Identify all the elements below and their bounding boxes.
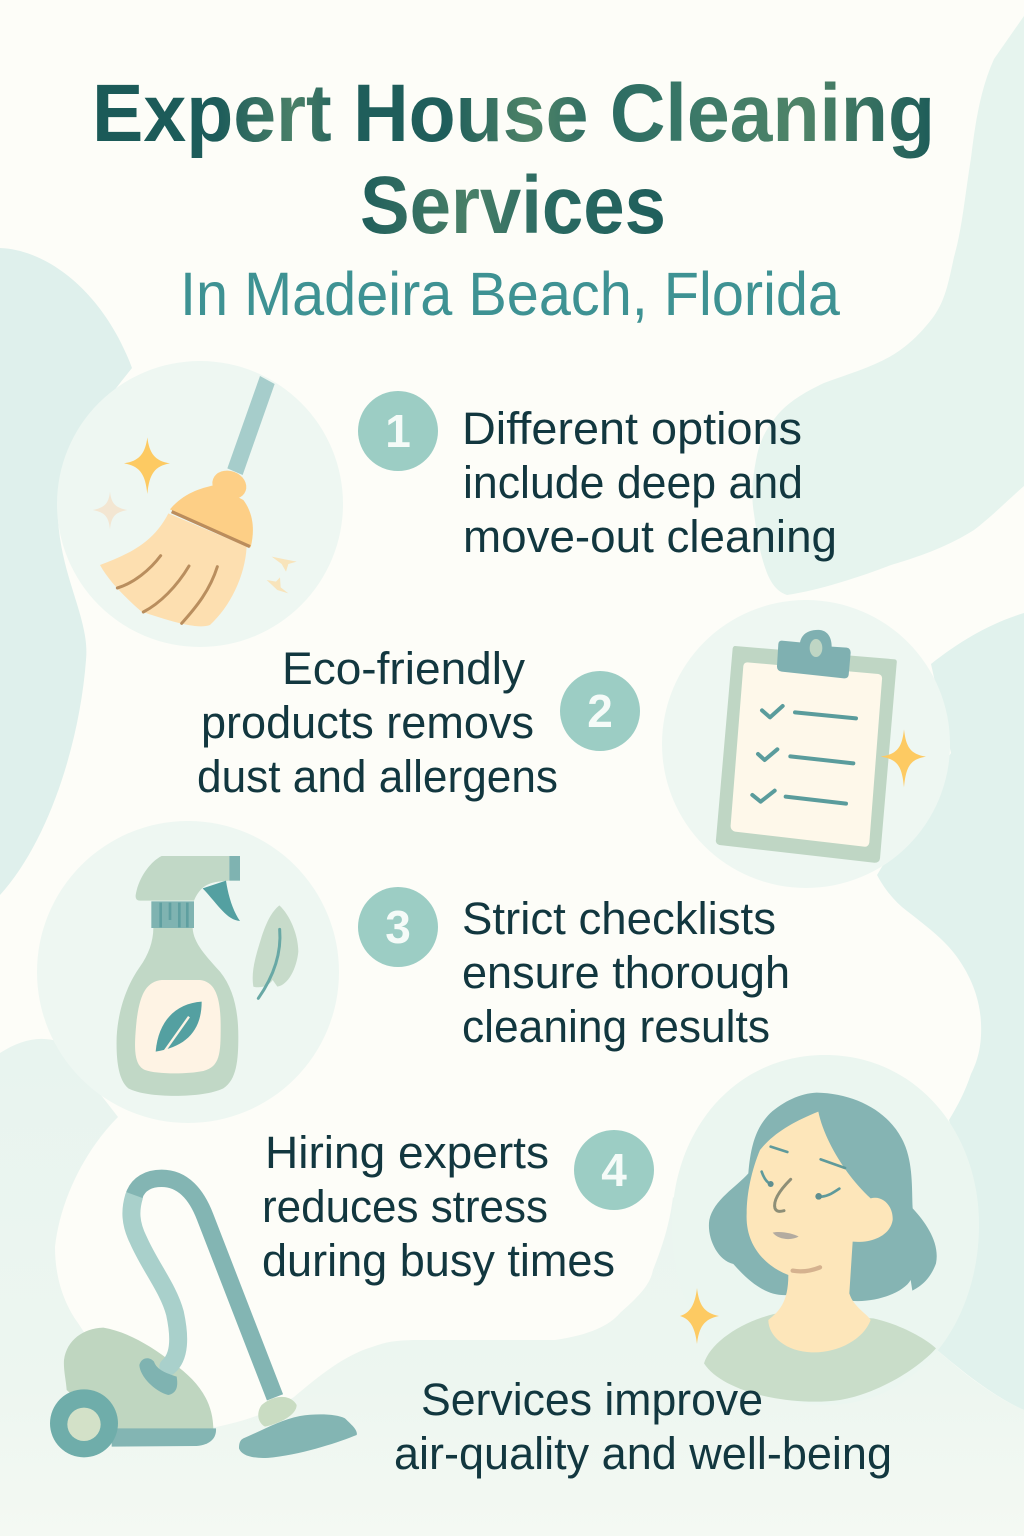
icon: person in circle (672, 1055, 979, 1405)
text: closing statement: Services improve (421, 1374, 763, 1425)
number badge 2 (560, 671, 640, 751)
icon: clipboard in circle (662, 600, 950, 888)
text: point 4: reduces stress (262, 1181, 548, 1232)
title: Services (360, 160, 666, 251)
icon: broom in circle (57, 361, 343, 647)
number badge 4 (574, 1130, 654, 1210)
icon: sparkle near person (680, 1288, 719, 1344)
text: point 1 (462, 403, 837, 562)
number badge 1: 1 (385, 405, 411, 457)
title: Expert House Cleaning (92, 68, 935, 159)
text: point 2 (197, 643, 558, 802)
text: point 3: cleaning results (462, 1001, 770, 1052)
number badge 1 (358, 391, 438, 471)
number badge 4: 4 (601, 1144, 627, 1196)
text: point 2: Eco-friendly (282, 643, 526, 694)
title (92, 68, 935, 251)
number badge 3 (358, 887, 438, 967)
text: closing statement (394, 1374, 892, 1479)
icon: spray bottle in circle (37, 821, 339, 1123)
subtitle: In Madeira Beach, Florida (180, 260, 840, 328)
text: point 3: Strict checklists (462, 893, 776, 944)
number badge 3: 3 (385, 901, 411, 953)
text: point 1: Different options (462, 403, 802, 454)
text: point 2: dust and allergens (197, 751, 558, 802)
icon: vacuum cleaner (50, 1178, 357, 1458)
number badge 2: 2 (587, 685, 613, 737)
text: point 3: ensure thorough (462, 947, 790, 998)
text: point 1: include deep and (463, 457, 803, 508)
text: point 2: products removs (201, 697, 534, 748)
text: point 1: move-out cleaning (463, 511, 837, 562)
text: point 4: during busy times (262, 1235, 615, 1286)
text: closing statement: air-quality and well-being (394, 1428, 892, 1479)
text: point 4: Hiring experts (265, 1127, 549, 1178)
text: point 3 (462, 893, 790, 1052)
text: point 4 (262, 1127, 615, 1286)
